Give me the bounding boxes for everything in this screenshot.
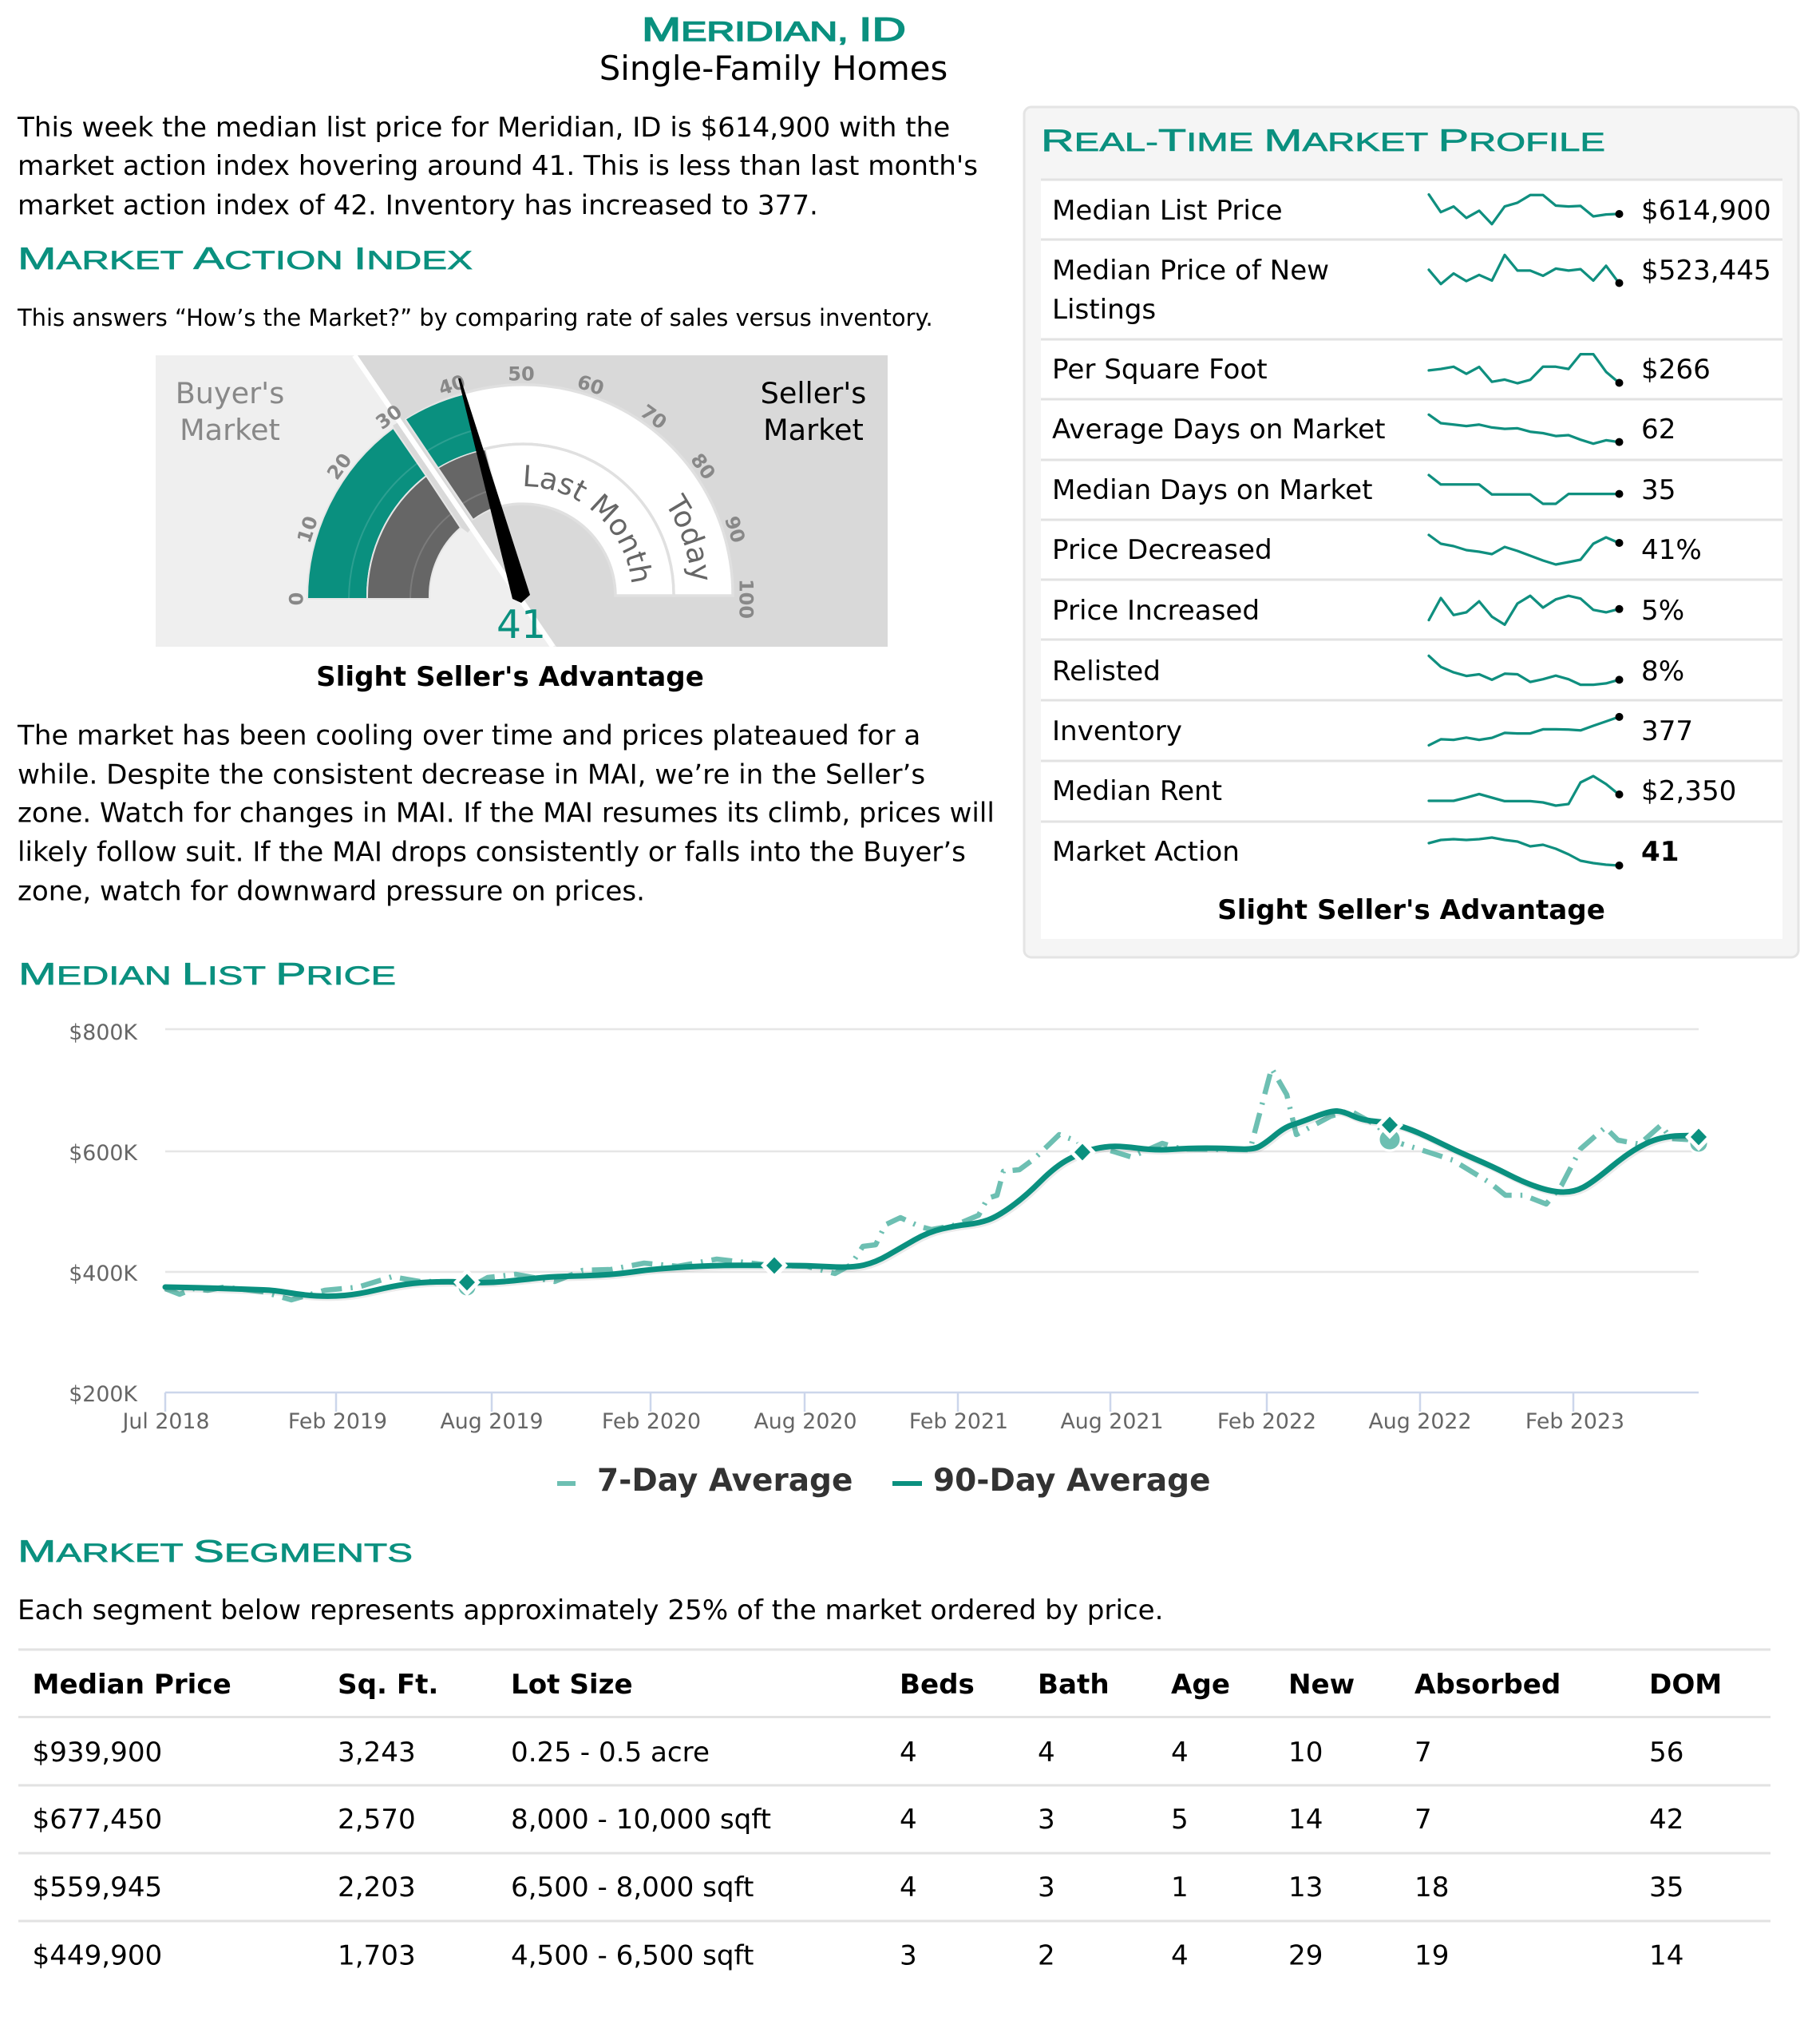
title: Single-Family Homes	[599, 49, 948, 88]
x axis labels: Feb 2023	[1525, 1409, 1624, 1434]
table row 1: 4	[900, 1737, 917, 1769]
table: market segments	[18, 1650, 1771, 1972]
table row 1: 0.25 - 0.5 acre	[511, 1737, 710, 1769]
table row 4: 3	[900, 1940, 917, 1972]
x axis labels: Feb 2022	[1217, 1409, 1316, 1434]
table row 1	[32, 1737, 1683, 1769]
table header: Age	[1171, 1669, 1230, 1701]
row: price decreased	[1052, 534, 1702, 566]
row: per square foot	[1052, 354, 1711, 386]
row: market action: 41	[1641, 836, 1679, 868]
table row 3: 4	[900, 1872, 917, 1903]
y axis labels: $400K	[69, 1262, 138, 1286]
table row 1: 10	[1288, 1737, 1323, 1769]
gauge seller side arcs	[406, 385, 733, 596]
row: price decreased: 41%	[1641, 534, 1702, 566]
market segments description: Each segment below represents approximately 25% of the market ordered by price.	[18, 1594, 1164, 1626]
commentary text block: The market has been cooling over time and prices plateaued for a	[17, 720, 920, 752]
table row 2: 5	[1171, 1804, 1189, 1836]
y axis labels: $200K	[69, 1382, 138, 1407]
commentary text block: zone, watch for downward pressure on prices.	[18, 875, 645, 907]
intro text block	[17, 112, 978, 222]
table row 4: $449,900	[32, 1940, 162, 1972]
x axis labels: Aug 2022	[1368, 1409, 1472, 1434]
intro text block: This week the median list price for Meridian, ID is $614,900 with the	[17, 112, 950, 144]
table row 3: 3	[1038, 1872, 1055, 1903]
gauge scale labels: 30	[372, 400, 406, 434]
row: median days on market: 35	[1641, 474, 1676, 506]
row: inventory	[1052, 713, 1693, 747]
heading: median list price: M EDIAN L IST P RICE	[18, 957, 396, 992]
x axis labels: Feb 2019	[288, 1409, 387, 1434]
table row 2: 3	[1038, 1804, 1055, 1836]
chart legend: 90-Day Average	[933, 1463, 1211, 1499]
table row 3: 2,203	[338, 1872, 416, 1903]
table row 3: 1	[1171, 1872, 1189, 1903]
table row 1: 56	[1649, 1737, 1683, 1769]
table row 4: 19	[1414, 1940, 1449, 1972]
title	[599, 10, 948, 88]
table header: Bath	[1038, 1669, 1110, 1701]
table row 2	[32, 1804, 1683, 1836]
row: median rent: Median Rent	[1052, 775, 1222, 807]
y axis labels: $600K	[69, 1141, 138, 1166]
commentary text block: likely follow suit. If the MAI drops consistently or falls into the Buyer’s	[18, 837, 966, 869]
gauge scale labels: 0	[286, 592, 308, 605]
seller's market label: Market	[763, 413, 864, 447]
table row 2: $677,450	[32, 1804, 162, 1836]
row: price increased: 5%	[1641, 595, 1684, 627]
commentary text block	[17, 720, 995, 907]
intro text block: market action index hovering around 41. This is less than last month's	[18, 150, 978, 182]
row: relisted: 8%	[1641, 656, 1684, 687]
table header	[32, 1669, 1722, 1701]
gauge arc labels: Last Month	[525, 465, 651, 583]
title: M ERIDIAN, ID	[642, 10, 906, 48]
table row 4: 4	[1171, 1940, 1189, 1972]
table row 1: 4	[1038, 1737, 1055, 1769]
row: median list price: $614,900	[1641, 195, 1771, 227]
table row 3: 13	[1288, 1872, 1323, 1903]
row: median days on market: Median Days on Market	[1052, 474, 1372, 506]
gauge scale labels: 50	[508, 362, 535, 385]
market action index description: This answers “How’s the Market?” by comparing rate of sales versus inventory.	[17, 304, 933, 331]
chart legend: 7-Day Average	[597, 1463, 853, 1499]
row: median price of new listings: Listings	[1052, 294, 1156, 326]
gauge arc labels: Today	[669, 492, 707, 580]
panel caption: Slight Seller's Advantage	[1217, 894, 1605, 926]
commentary text block: zone. Watch for changes in MAI. If the MAI resumes its climb, prices will	[18, 797, 995, 829]
series: 90-day average	[165, 1111, 1700, 1297]
table row 1: 7	[1414, 1737, 1432, 1769]
row: market action: Market Action	[1052, 836, 1240, 868]
row: relisted: Relisted	[1052, 656, 1161, 687]
x axis labels: Aug 2021	[1060, 1409, 1164, 1434]
gauge scale labels: 20	[322, 450, 357, 484]
table row 3: 18	[1414, 1872, 1449, 1903]
gauge buyer side arcs	[307, 428, 461, 599]
gauge: market action index	[156, 355, 888, 648]
gauge arc labels	[525, 465, 707, 583]
x axis labels	[121, 1409, 1624, 1434]
gauge scale labels: 100	[734, 579, 757, 619]
row: price decreased: Price Decreased	[1052, 534, 1272, 566]
row: median price of new listings: Median Price of New	[1052, 255, 1329, 287]
table header: Sq. Ft.	[338, 1669, 438, 1701]
buyer's market label: Buyer's	[176, 376, 284, 410]
seller's market label	[761, 376, 866, 447]
table row 3	[32, 1872, 1683, 1903]
row: market action	[1052, 836, 1679, 869]
table row 2: 42	[1649, 1804, 1683, 1836]
table row 2: 14	[1288, 1804, 1323, 1836]
table row 3: $559,945	[32, 1872, 162, 1903]
row: median rent	[1052, 775, 1736, 807]
line chart: median list price	[69, 1020, 1710, 1499]
seller's market label: Seller's	[761, 376, 866, 410]
table row 4: 14	[1649, 1940, 1683, 1972]
table row 2: 4	[900, 1804, 917, 1836]
gauge needle	[458, 378, 530, 603]
row: median list price	[1052, 195, 1771, 227]
table header: DOM	[1649, 1669, 1722, 1701]
row: median list price: Median List Price	[1052, 195, 1283, 227]
gauge value: 41	[497, 603, 546, 648]
table row 4	[32, 1940, 1683, 1972]
table row 4: 2	[1038, 1940, 1055, 1972]
gauge scale labels	[286, 362, 757, 619]
panel: real-time market profile	[1024, 107, 1798, 957]
row: median rent: $2,350	[1641, 775, 1736, 807]
table row 1: $939,900	[32, 1737, 162, 1769]
series: 7-day average	[165, 1068, 1699, 1300]
row: per square foot: Per Square Foot	[1052, 354, 1268, 386]
gauge scale labels: 70	[636, 400, 671, 434]
buyer's market label: Market	[180, 413, 280, 447]
heading: market action index: M ARKET A CTION INDEX	[18, 242, 473, 276]
chart legend	[557, 1463, 1211, 1499]
x axis labels: Jul 2018	[121, 1409, 210, 1434]
commentary text block: while. Despite the consistent decrease in MAI, we’re in the Seller’s	[18, 759, 925, 790]
table row 1: 4	[1171, 1737, 1189, 1769]
table row 4: 1,703	[338, 1940, 416, 1972]
row: per square foot: $266	[1641, 354, 1711, 386]
row: median price of new listings: $523,445	[1641, 255, 1771, 287]
x axis labels: Feb 2020	[602, 1409, 701, 1434]
panel heading: R EAL- T IME M ARKET P ROFILE	[1041, 124, 1605, 158]
gauge scale labels: 80	[686, 450, 720, 484]
row: average days on market	[1052, 414, 1676, 446]
table row 3: 35	[1649, 1872, 1683, 1903]
table row 4: 29	[1288, 1940, 1323, 1972]
x axis labels: Aug 2019	[440, 1409, 544, 1434]
x axis labels: Aug 2020	[754, 1409, 857, 1434]
row: average days on market: Average Days on Market	[1052, 414, 1385, 446]
intro text block: market action index of 42. Inventory has increased to 377.	[18, 190, 818, 222]
y axis labels: $800K	[69, 1020, 138, 1045]
gauge scale labels: 60	[575, 370, 607, 400]
row: inventory: Inventory	[1052, 715, 1182, 747]
heading: market segments: M ARKET S EGMENTS	[18, 1535, 413, 1569]
row: average days on market: 62	[1641, 414, 1676, 446]
buyer's market label	[176, 376, 284, 447]
x axis labels: Feb 2021	[909, 1409, 1008, 1434]
gauge caption: Slight Seller's Advantage	[316, 661, 704, 693]
table header: Beds	[900, 1669, 975, 1701]
table row 4: 4,500 - 6,500 sqft	[511, 1940, 754, 1972]
chart point markers	[457, 1114, 1710, 1297]
row: median price of new listings	[1052, 255, 1771, 326]
table header: Lot Size	[511, 1669, 633, 1701]
table row 1: 3,243	[338, 1737, 416, 1769]
y axis labels	[69, 1020, 138, 1407]
table row 3: 6,500 - 8,000 sqft	[511, 1872, 754, 1903]
gauge scale labels: 40	[436, 370, 468, 400]
table header: Absorbed	[1414, 1669, 1561, 1701]
row: price increased: Price Increased	[1052, 595, 1260, 627]
row: relisted	[1052, 656, 1684, 687]
table row 2: 2,570	[338, 1804, 416, 1836]
table header: Median Price	[32, 1669, 231, 1701]
row: median days on market	[1052, 474, 1676, 506]
gauge scale labels: 10	[293, 513, 322, 545]
table header: New	[1288, 1669, 1355, 1701]
gauge scale labels: 90	[720, 513, 750, 545]
row: price increased	[1052, 595, 1684, 627]
row: inventory: 377	[1641, 715, 1693, 747]
table row 2: 7	[1414, 1804, 1432, 1836]
table row 2: 8,000 - 10,000 sqft	[511, 1804, 771, 1836]
